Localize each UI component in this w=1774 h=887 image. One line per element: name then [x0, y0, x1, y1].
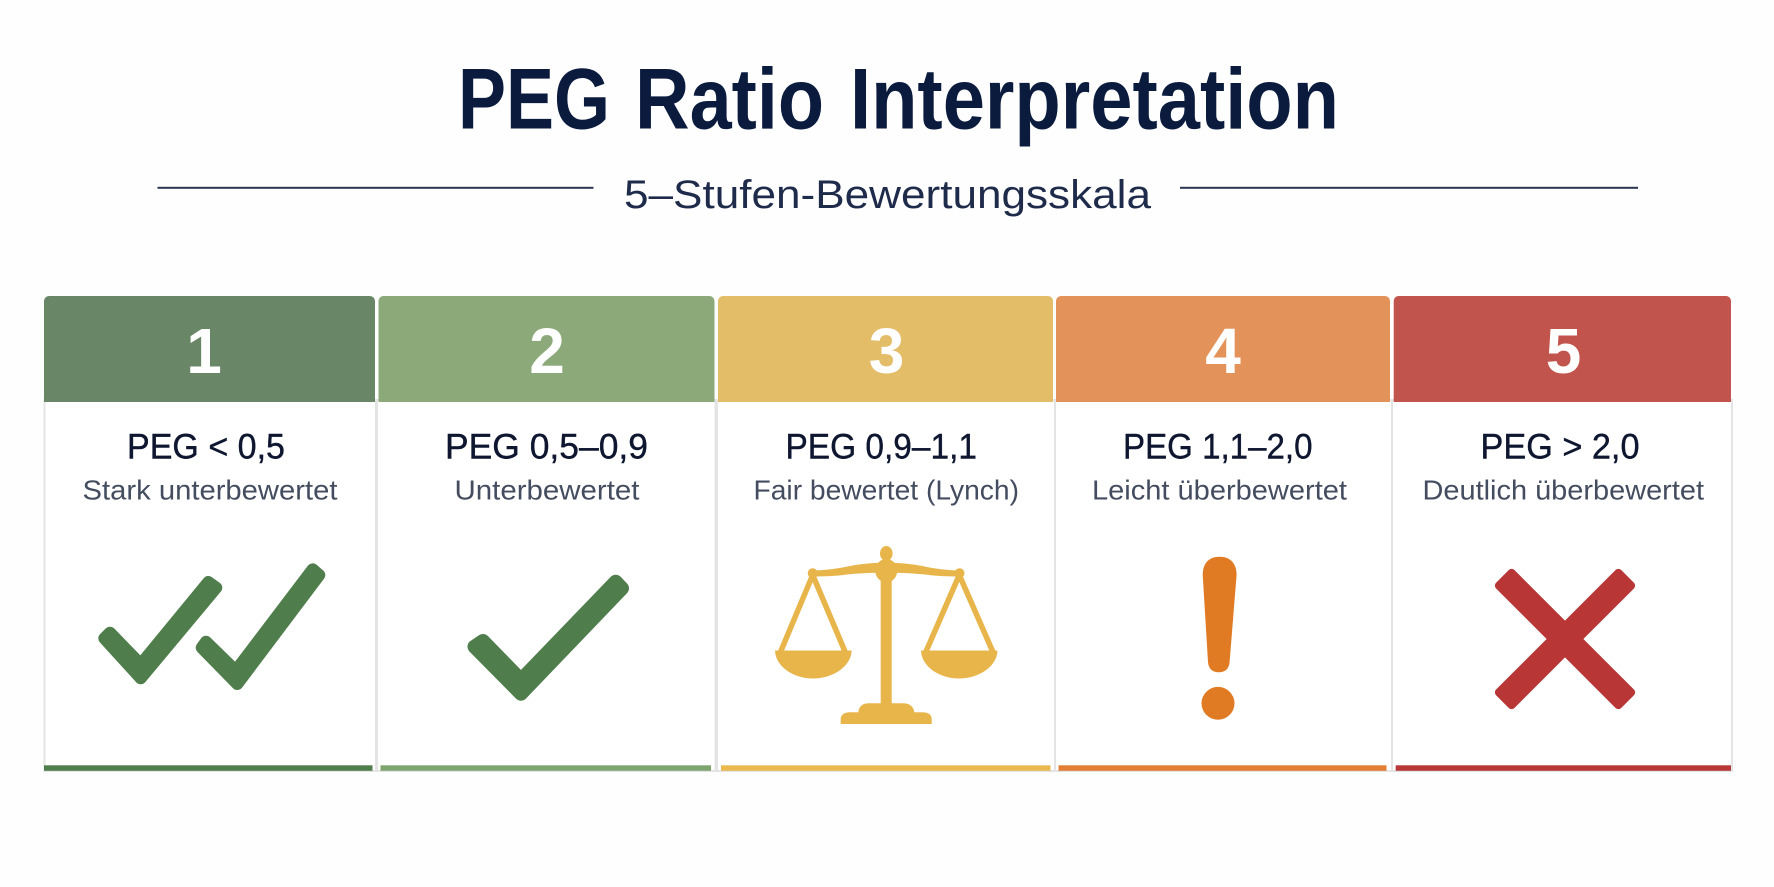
title: Interpretation: [850, 51, 1339, 147]
bottom bar: level 2: [380, 765, 711, 771]
title: Ratio: [635, 51, 824, 147]
icon: double check mark: [104, 569, 319, 684]
title: [458, 51, 1339, 147]
header: level 3: [718, 296, 1053, 402]
panel: level 4: [1055, 296, 1392, 771]
range: level 3: PEG 0,9–1,1: [786, 428, 977, 466]
description: level 3: Fair bewertet (Lynch): [754, 474, 1019, 506]
bottom bar: level 3: [721, 765, 1050, 771]
header: level 2: [378, 296, 714, 402]
panel: level 5: [1392, 296, 1732, 771]
panel: level 2: [377, 296, 716, 771]
bottom bar: level 4: [1058, 765, 1386, 771]
icon: exclamation mark: [1202, 557, 1237, 720]
icon: cross: [1493, 567, 1637, 711]
icon: balance scale: [775, 546, 998, 724]
header: level 5: [1394, 296, 1731, 402]
header: level 4: 4: [1205, 315, 1241, 387]
description: level 5: Deutlich überbewertet: [1422, 474, 1704, 506]
range: level 5: PEG > 2,0: [1480, 428, 1640, 466]
range: level 1: PEG < 0,5: [127, 428, 285, 466]
description: level 2: Unterbewertet: [454, 474, 640, 506]
bottom bar: level 5: [1396, 765, 1731, 771]
panel: level 1: [44, 296, 376, 771]
header: level 2: 2: [529, 315, 565, 387]
header: level 3: 3: [869, 315, 904, 387]
header: level 1: 1: [186, 315, 222, 387]
header: level 4: [1056, 296, 1390, 402]
header: level 1: [44, 296, 375, 402]
description: level 1: Stark unterbewertet: [82, 474, 338, 506]
description: level 4: Leicht überbewertet: [1092, 474, 1347, 506]
range: level 4: PEG 1,1–2,0: [1123, 428, 1312, 466]
icon: check mark: [474, 582, 622, 694]
subtitle with rules: 5–Stufen-Bewertungsskala: [624, 173, 1152, 217]
bottom bar: level 1: [44, 765, 372, 771]
title: PEG: [458, 51, 610, 147]
range: level 2: PEG 0,5–0,9: [445, 428, 648, 466]
panel: level 3: [717, 296, 1055, 771]
header: level 5: 5: [1546, 315, 1581, 387]
